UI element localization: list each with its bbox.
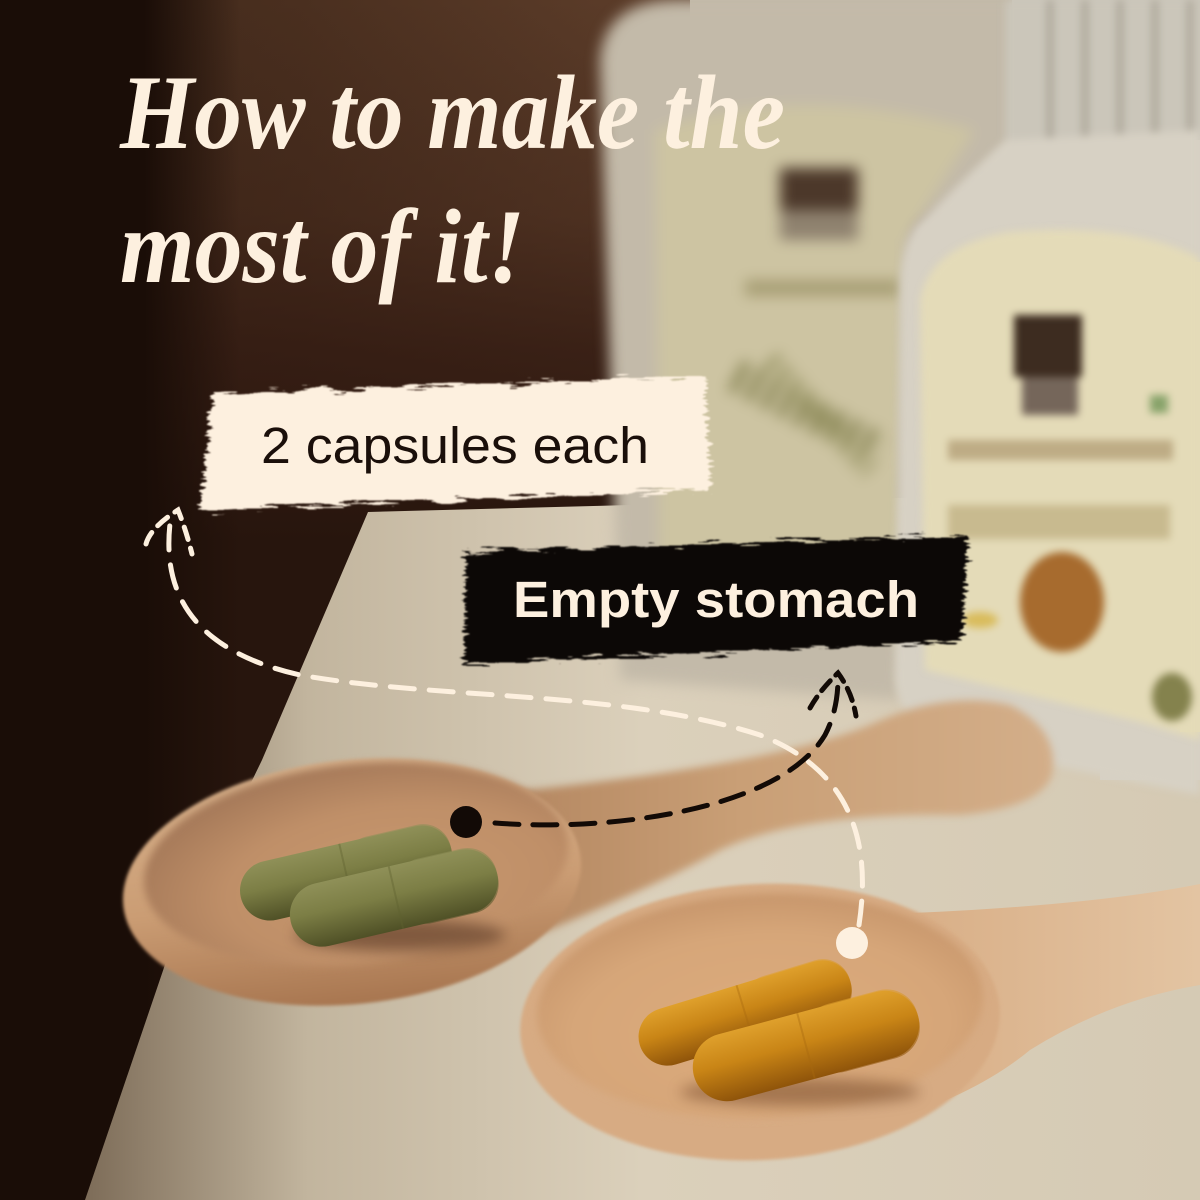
spoon: turmeric capsules [513,872,1200,1172]
spoon handle [430,700,1053,950]
capsule: green front [283,842,505,954]
capsule: turmeric front [685,982,927,1110]
marker: cream dot [836,927,868,959]
title: How to make the [119,54,785,171]
label: Empty stomach [464,536,968,664]
title [119,54,785,305]
marker: dark dot [450,806,482,838]
label: Empty stomach: Empty stomach [513,571,919,628]
title: most of it! [120,188,525,305]
label: 2 capsules each: 2 capsules each [261,417,649,474]
spoon: green capsules [111,700,1053,1027]
label: 2 capsules each [200,376,711,510]
capsule: green back [234,818,458,928]
capsule: turmeric back [631,952,859,1074]
arrow: turmeric spoon to 2 capsules each [146,510,862,925]
cloth [85,490,1200,1200]
spoon bowl [111,737,593,1027]
spoon handle [860,884,1200,1130]
blurred back bottle [600,0,1030,700]
spoon bowl [513,872,1007,1172]
arrow: green spoon to Empty stomach [495,673,856,825]
blurred front bottle [895,0,1200,795]
